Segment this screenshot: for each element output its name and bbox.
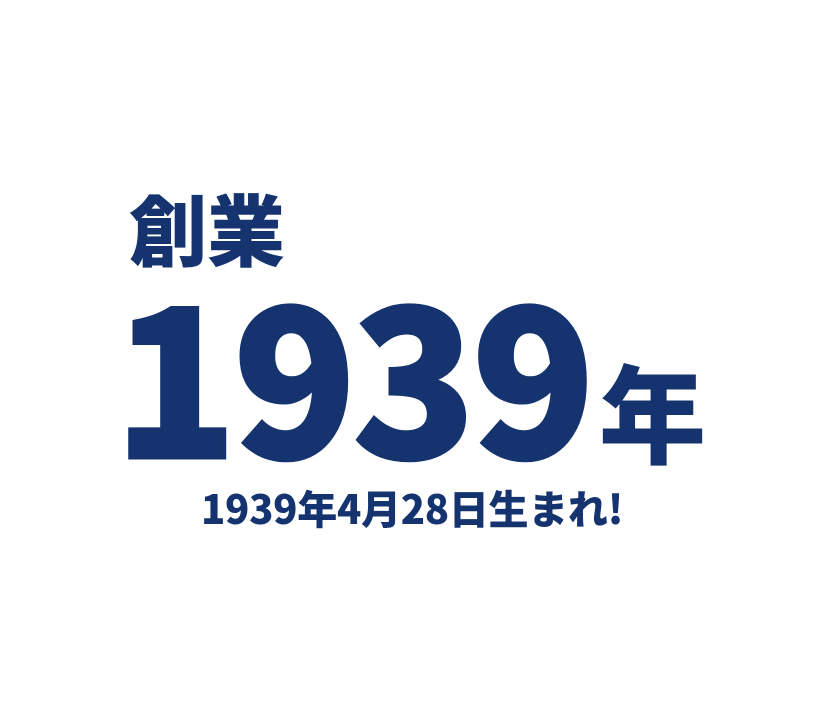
heading: founding: 創業 — [129, 171, 285, 283]
big year number: 1939 — [114, 225, 591, 517]
year suffix: 年 — [599, 331, 706, 486]
subtitle: birth date: 1939年4月28日生まれ! — [201, 478, 623, 536]
